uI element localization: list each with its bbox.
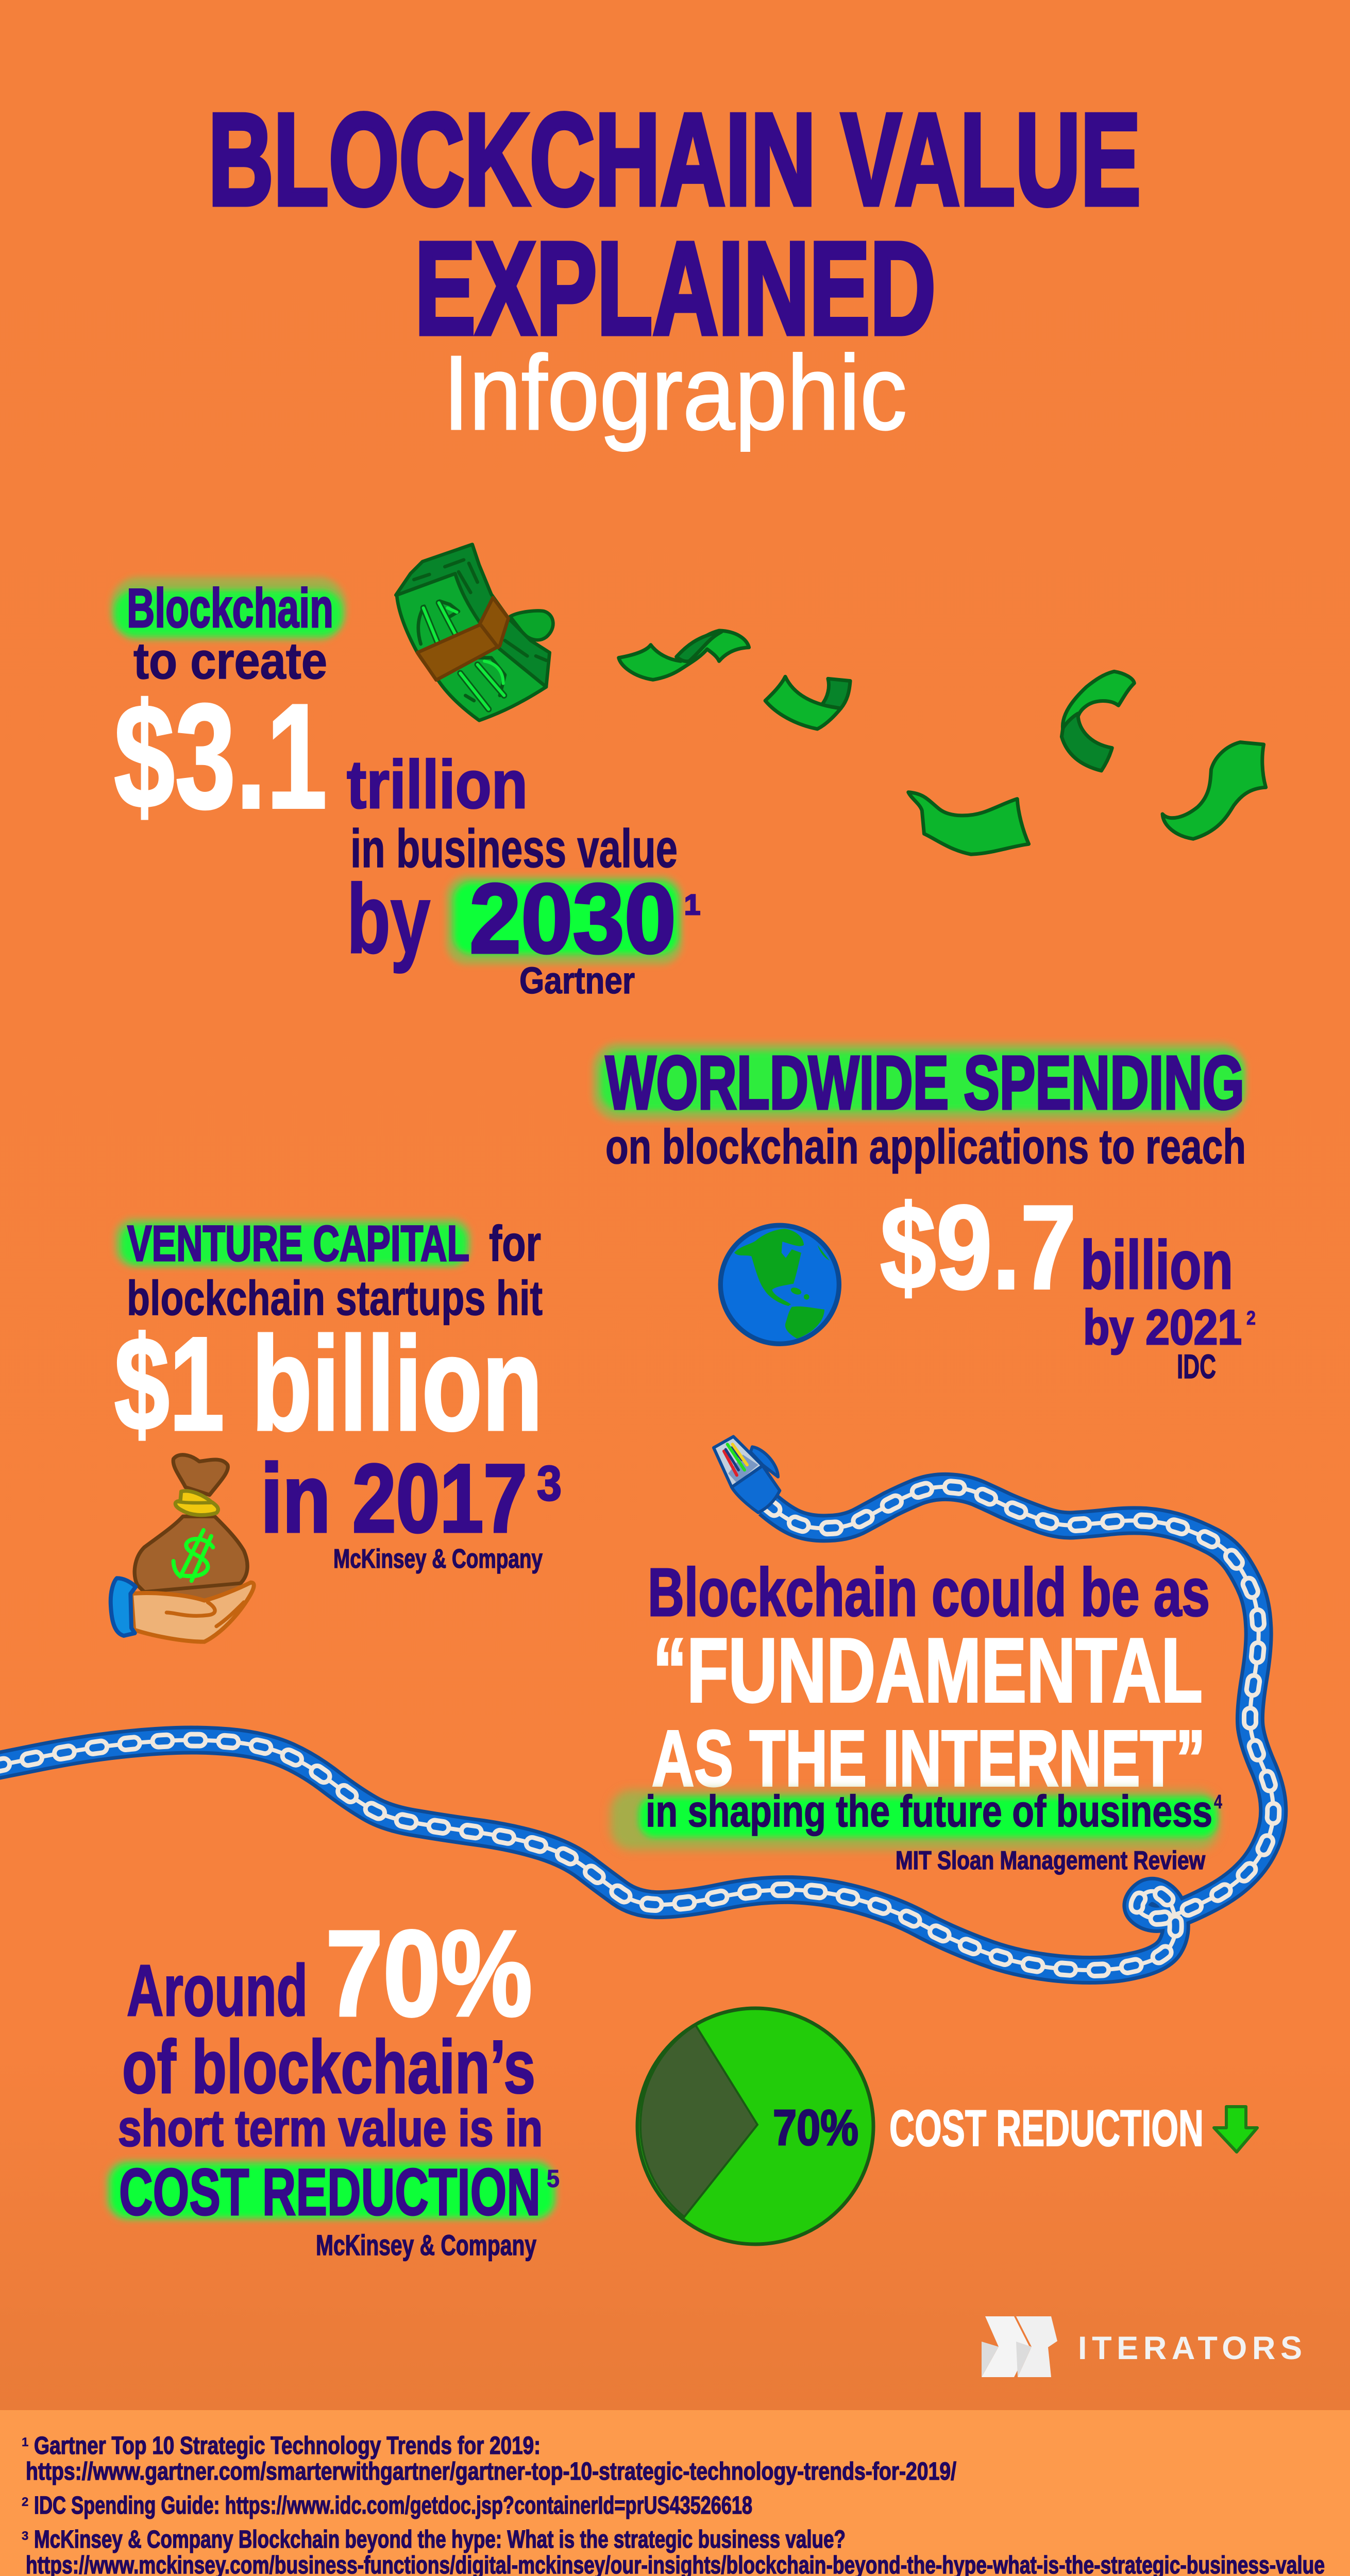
chain center strand (0, 1487, 1273, 1970)
text: by 2021: by 2021 (1083, 1300, 1242, 1355)
illustration: network cable chain (0, 1436, 1273, 1970)
text: in business value: in business value (350, 819, 678, 879)
panel: venture capital (111, 1215, 562, 1642)
text: for: for (489, 1215, 541, 1272)
reference 1 title: Gartner Top 10 Strategic Technology Trends for 2019: (34, 2432, 541, 2460)
cable fill (0, 1487, 1273, 1970)
logo wordmark: ITERATORS (1078, 2330, 1302, 2366)
text: short term value is in: short term value is in (118, 2099, 543, 2157)
icon: money bag on hand (111, 1455, 254, 1642)
icon: down arrow (1214, 2107, 1257, 2152)
subtitle: Infographic (443, 334, 907, 452)
logo mark (982, 2316, 1057, 2377)
icon: globe (720, 1225, 839, 1344)
highlight: 2030 (446, 876, 682, 964)
stat: $1 billion: $1 billion (114, 1309, 543, 1458)
reference 1 mark: 1 (22, 2435, 28, 2449)
text: to create: to create (133, 632, 327, 690)
heading: venture capital: VENTURE CAPITAL (127, 1215, 469, 1272)
footnote mark 3: 3 (537, 1456, 562, 1511)
cable outline (0, 1487, 1273, 1970)
text: by: by (347, 865, 430, 974)
highlight: worldwide spending (593, 1043, 1246, 1120)
text: billion: billion (1081, 1227, 1233, 1303)
text: in 2017: in 2017 (261, 1444, 527, 1552)
stat: 70%: 70% (326, 1905, 532, 2042)
footnote mark 1: 1 (684, 888, 700, 921)
reference 2: IDC Spending Guide: https://www.idc.com/getdoc.jsp?containerId=prUS43526618 (34, 2492, 752, 2519)
panel: seventy percent cost reduction (106, 1905, 1257, 2261)
bill 5 (908, 792, 1029, 854)
panel: references footer (0, 2410, 1350, 2576)
text: cost reduction: COST REDUCTION (119, 2156, 541, 2229)
source: Gartner: Gartner (519, 960, 635, 1002)
bill 3 (1061, 671, 1134, 771)
footnote mark 4: 4 (1214, 1791, 1222, 1813)
source: IDC: IDC (1177, 1347, 1216, 1385)
bill 2 (765, 676, 850, 729)
footnote mark 5: 5 (547, 2165, 560, 2193)
chain links outer (0, 1487, 1273, 1970)
label: cost reduction: COST REDUCTION (889, 2099, 1204, 2157)
highlight: in shaping (611, 1790, 1219, 1850)
reference 1 url: https://www.gartner.com/smarterwithgartner/gartner-top-10-strategic-technology-trends-for-2019/ (26, 2458, 956, 2485)
text: Around: Around (127, 1950, 308, 2031)
text: 2030: 2030 (469, 863, 676, 974)
reference 2 mark: 2 (22, 2495, 28, 2509)
bill 1 (619, 631, 749, 680)
panel: three trillion business value (110, 545, 1266, 1002)
highlight: venture capital (114, 1218, 471, 1267)
panel: fundamental as the internet (611, 1554, 1222, 1875)
bill 4 (1162, 742, 1266, 839)
text: in shaping the future of business: in shaping the future of business (646, 1787, 1212, 1836)
logo: iterators (982, 2316, 1302, 2377)
highlight: Blockchain (110, 577, 346, 641)
chain links inner (0, 1487, 1273, 1970)
footnote mark 2: 2 (1246, 1308, 1256, 1329)
reference 3 title: McKinsey & Company Blockchain beyond the hype: What is the strategic business value? (34, 2526, 846, 2553)
source: MIT Sloan: MIT Sloan Management Review (896, 1846, 1205, 1875)
icon: flying bills (619, 631, 1266, 854)
text: blockchain startups hit: blockchain startups hit (127, 1271, 543, 1326)
pie label: 70% (773, 2099, 858, 2156)
source: McKinsey: McKinsey & Company (316, 2229, 536, 2261)
icon: ethernet plug (714, 1436, 780, 1513)
stat: $9.7: $9.7 (880, 1181, 1076, 1314)
highlight: cost reduction (106, 2160, 557, 2221)
text: of blockchain's: of blockchain’s (122, 2025, 535, 2109)
panel: worldwide spending (593, 1041, 1256, 1385)
pie chart (637, 2008, 873, 2244)
icon: wad of cash (396, 545, 553, 720)
stat: $3.1: $3.1 (114, 673, 327, 840)
title line 2: EXPLAINED (415, 215, 936, 362)
text: Blockchain: Blockchain (127, 577, 333, 639)
title block (208, 86, 1141, 452)
source: McKinsey: McKinsey & Company (333, 1544, 543, 1574)
reference 3 mark: 3 (22, 2529, 28, 2543)
text: trillion: trillion (347, 747, 528, 822)
